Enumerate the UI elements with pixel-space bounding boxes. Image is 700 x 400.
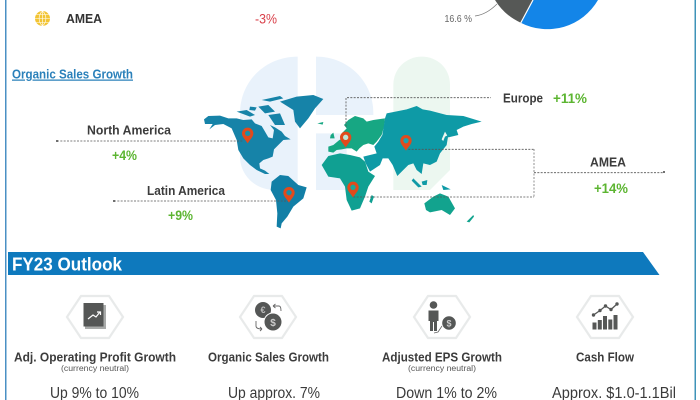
- map: Asia: [363, 106, 482, 190]
- icon: currency exchange: $: [270, 318, 276, 329]
- callout: AMEA +14%: AMEA: [590, 154, 627, 170]
- heading: Organic Sales Growth: Organic Sales Growth: [12, 68, 133, 82]
- sub-label: (currency neutral): [61, 364, 129, 373]
- icon: currency exchange: €: [260, 305, 266, 315]
- callout: Europe +11%: +11%: [553, 90, 588, 106]
- icon: report with rising arrow: [67, 296, 123, 338]
- label: Organic Sales Growth: [208, 350, 329, 364]
- map: location pins: [242, 128, 412, 203]
- callout: Latin America +9%: +9%: [168, 207, 193, 223]
- callout: AMEA +14%: [534, 149, 665, 197]
- pie leader line: [475, 4, 497, 16]
- callout: Latin America +9%: [113, 183, 226, 223]
- callout: North America +4%: [56, 122, 172, 163]
- callout: North America +4%: North America: [87, 122, 172, 138]
- sub-label: (currency neutral): [408, 364, 476, 373]
- callout: Europe +11%: [503, 90, 588, 106]
- callout: North America +4%: +4%: [112, 147, 137, 163]
- map: Europe: [317, 116, 385, 153]
- row label: AMEA: AMEA: [66, 11, 103, 26]
- label: Cash Flow: [576, 350, 635, 364]
- icon: person chained to coin: $: [446, 318, 452, 328]
- panel: Adjusted EPS Growth: [382, 296, 502, 400]
- pie chart: [444, 0, 600, 29]
- icon: globe: [35, 11, 50, 26]
- pie slice: blue: [521, 0, 600, 29]
- world map: [57, 95, 664, 228]
- map: North America: [204, 95, 323, 174]
- banner: FY23 Outlook: [8, 252, 660, 275]
- banner: FY23 Outlook: FY23 Outlook: [12, 254, 123, 274]
- background logo shapes: [240, 57, 450, 190]
- callout: Latin America +9%: Latin America: [147, 183, 226, 198]
- label: Adjusted EPS Growth: [382, 350, 502, 364]
- pie label: 16.6%: 16.6 %: [444, 14, 472, 25]
- label: Adj. Operating Profit Growth: [14, 350, 176, 364]
- map: South America: [271, 175, 307, 228]
- panel: AMEA table row: [35, 10, 277, 26]
- panel: Adj. Operating Profit Growth: [14, 296, 176, 400]
- map: Africa: [322, 153, 375, 211]
- row value: -3%: -3%: [255, 10, 277, 26]
- map: connector lines: [57, 98, 664, 201]
- pie slice: dark grey 16.6%: [495, 0, 533, 23]
- icon: currency exchange: [240, 296, 296, 338]
- map: Australia and New Zealand: [424, 193, 474, 222]
- panel: Organic Sales Growth: [208, 296, 329, 400]
- panel: Cash Flow: [552, 296, 676, 400]
- icon: bar and line chart: [577, 296, 633, 338]
- callout: Europe +11%: Europe: [503, 90, 543, 106]
- callout: AMEA +14%: +14%: [594, 180, 629, 196]
